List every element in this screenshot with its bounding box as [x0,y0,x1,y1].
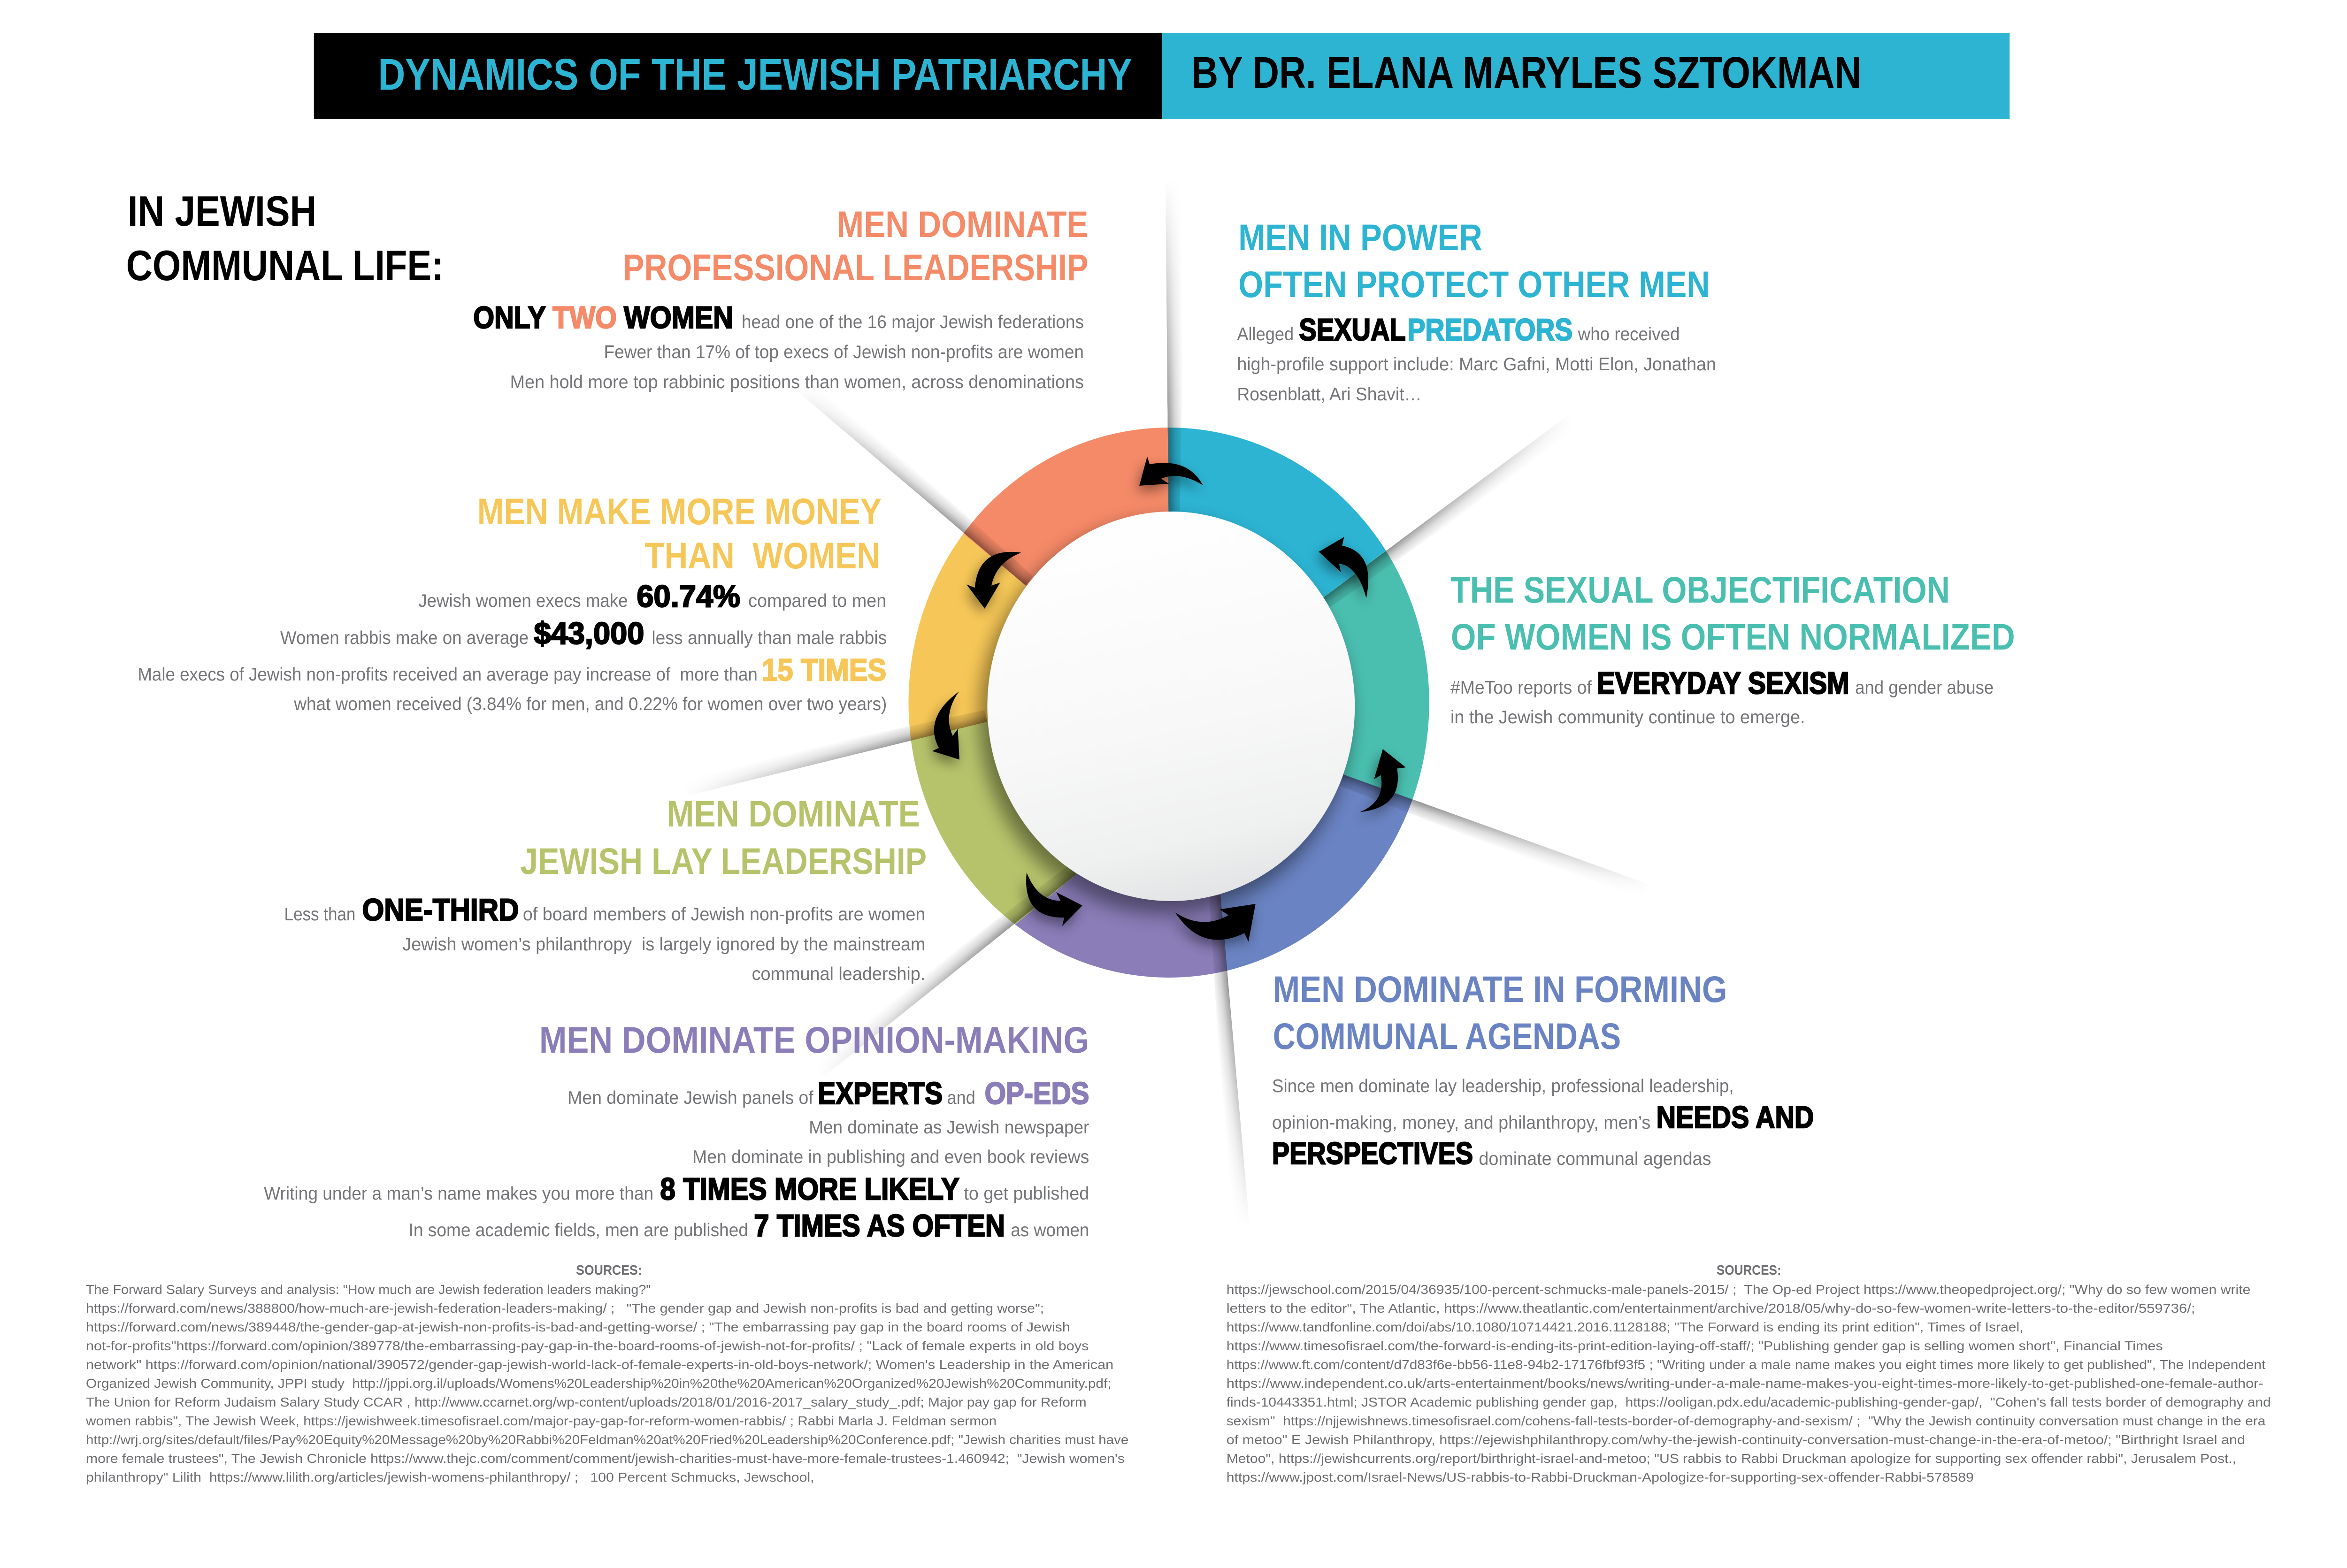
sources: right column: https://www.independent.co.uk/arts-entertainment/books/news/writing-under-a-male-name-makes-you-eight-times-more-likely-to-get-published-one-female-author- [1227,1376,2263,1391]
panel: the sexual objectification [1450,569,2015,727]
body text: Less than [284,904,355,925]
body text: Fewer than 17% of top execs of Jewish non-profits are women [604,342,1084,362]
body text: compared to men [748,591,886,611]
body text: Jewish women execs make [418,591,628,611]
body text: high-profile support include: Marc Gafni, Motti Elon, Jonathan [1237,354,1716,375]
heading: THE SEXUAL OBJECTIFICATION [1450,569,1950,611]
intro heading: IN JEWISH [128,187,316,235]
body text: 7 TIMES AS OFTEN [754,1208,1005,1243]
fold shadows: radiating rays [680,178,1653,1227]
sources: left column: Organized Jewish Community, JPPI study http://jppi.org.il/uploads/Womens%20Leadership%20in%20the%20American%20Organized%20Jewish%20Community.pdf; [86,1376,1111,1391]
heading: MEN DOMINATE IN FORMING [1273,969,1727,1010]
sources: left column [85,1262,1128,1484]
heading: THAN WOMEN [644,535,880,576]
body text: and gender abuse [1855,678,1994,698]
sources: right column: https://www.tandfonline.com/doi/abs/10.1080/10714421.2016.1128188; "The Forward is ending its print edition", Times of Israel, [1227,1319,2024,1334]
sources: right column: https://www.timesofisrael.com/the-forward-is-ending-its-print-edition-laying-off-staff/; "Publishing gender gap is selling women short", Financial Times [1227,1338,2163,1353]
sources: right column: SOURCES: [1717,1262,1781,1277]
arrow shadows [930,462,1404,947]
sources: right column: letters to the editor", The Atlantic, https://www.theatlantic.com/entertainment/archive/2018/05/why-do-so-few-women-write-letters-to-the-editor/559736/; [1227,1300,2195,1316]
heading: MEN DOMINATE [837,204,1088,245]
ring segments [909,428,1429,978]
body text: who received [1578,324,1680,344]
body text: to get published [964,1184,1089,1204]
heading [520,793,927,882]
heading: OF WOMEN IS OFTEN NORMALIZED [1451,616,2015,658]
body text [264,1076,1089,1243]
body text: dominate communal agendas [1479,1149,1711,1169]
heading [1238,217,1710,305]
body text: Women rabbis make on average [280,628,529,648]
body text: in the Jewish community continue to emerge. [1450,707,1805,727]
body text: as women [1011,1220,1089,1240]
body text: head one of the 16 major Jewish federations [742,312,1084,332]
body text: and [947,1088,975,1108]
sources: right column: https://www.ft.com/content/d7d83f6e-bb56-11e8-94b2-17176fbf93f5 ; "Writing under a male name makes you eight times more likely to get published", The Independent [1227,1357,2266,1372]
body text: EVERYDAY SEXISM [1597,665,1849,700]
body text: Alleged [1237,324,1294,344]
body text: Writing under a man’s name makes you more than [264,1184,653,1204]
body text [1450,665,1994,727]
sources: right column: of metoo" E Jewish Philanthropy, https://ejewishphilanthropy.com/why-the-jewish-continuity-conversation-must-change-in-the-era-of-metoo/; "Birthright Israel and [1227,1432,2245,1447]
body text: less annually than male rabbis [652,628,887,648]
arrow: purple to indigo [1175,904,1256,941]
cycle diagram [680,178,1653,1227]
arrow: teal to blue [1319,537,1368,598]
sources: left column: https://forward.com/news/388800/how-much-are-jewish-federation-leaders-making/ ; "The gender gap and Jewish non-profits is bad and getting worse"; [86,1300,1044,1316]
body text: communal leadership. [752,964,925,984]
sources: left column: women rabbis", The Jewish Week, https://jewishweek.timesofisrael.com/major-pay-gap-for-reform-women-rabbis/ ; Rabbi Marla J. Feldman sermon [85,1413,997,1428]
sources: left column: SOURCES: [576,1262,642,1277]
panel: men make more money [138,491,887,714]
body text: TWO [552,300,617,335]
body text: Men hold more top rabbinic positions than women, across denominations [510,372,1084,392]
body text: #MeToo reports of [1450,678,1592,698]
sources: left column: The Union for Reform Judaism Salary Study CCAR , http://www.ccarnet.org/wp-content/uploads/2018/01/2016-2017_salary_study_.pdf; Major pay gap for Reform [86,1394,1087,1409]
body text: Men dominate in publishing and even book reviews [692,1147,1089,1167]
body text [1237,312,1716,405]
body text: OP-EDS [985,1076,1089,1110]
body text: NEEDS AND [1657,1100,1814,1134]
body text [473,300,1084,392]
body text: Men dominate as Jewish newspaper [809,1117,1089,1138]
sources: left column: more female trustees", The Jewish Chronicle https://www.thejc.com/comment/comment/jewish-charities-must-have-more-female-trustees-1.460942; "Jewish women's [86,1451,1125,1466]
arrow: green to purple [1026,872,1082,926]
body text [284,892,925,984]
body text: 8 TIMES MORE LIKELY [660,1171,959,1206]
body text: ONE-THIRD [362,892,519,927]
body text: Since men dominate lay leadership, professional leadership, [1272,1076,1734,1096]
body text: EXPERTS [818,1076,943,1110]
heading [1273,969,1727,1057]
arrow: blue to coral [1139,457,1203,486]
disc shadow on ring [979,520,1351,914]
body text: Jewish women’s philanthropy is largely ignored by the mainstream [402,934,925,955]
title: DYNAMICS OF THE JEWISH PATRIARCHY [378,49,1132,99]
panel: jewish lay leadership [284,793,927,984]
arrow: indigo to teal [1360,749,1406,812]
heading: PROFESSIONAL LEADERSHIP [623,247,1088,288]
title banner [314,33,2010,119]
panel: opinion-making [264,1019,1089,1243]
body text: In some academic fields, men are published [409,1220,748,1240]
sources: left column: network" https://forward.com/opinion/national/390572/gender-gap-jewish-world-lack-of-female-experts-in-old-boys-network/; Women's Leadership in the American [86,1357,1113,1372]
body text: ONLY [473,300,546,335]
center disc [987,512,1355,901]
arrows [930,457,1406,947]
sources: left column: http://wrj.org/sites/default/files/Pay%20Equity%20Message%20by%20Rabbi%20Feldman%20at%20Fried%20Leadership%20Conference.pdf; "Jewish charities must have [86,1432,1128,1447]
sources: left column: not-for-profits"https://forward.com/opinion/389778/the-embarrassing-pay-gap-in-the-board-rooms-of-jewish-not-for-profits/ ; "Lack of female experts in old boys [86,1338,1089,1353]
heading [623,204,1088,288]
heading: MEN DOMINATE OPINION-MAKING [539,1019,1089,1061]
intro heading [126,187,444,290]
body text: Men dominate Jewish panels of [568,1088,813,1108]
heading: COMMUNAL AGENDAS [1273,1016,1621,1057]
intro heading: COMMUNAL LIFE: [126,242,444,290]
sources: right column [1227,1262,2271,1484]
body text: what women received (3.84% for men, and 0.22% for women over two years) [293,694,887,714]
body text: PERSPECTIVES [1272,1136,1473,1170]
arrow: coral to yellow [966,552,1021,609]
body text: 60.74% [637,579,740,613]
body text: PREDATORS [1407,312,1572,347]
heading: OFTEN PROTECT OTHER MEN [1238,264,1710,305]
sources: right column: sexism" https://njjewishnews.timesofisrael.com/cohens-fall-tests-border-of-demography-and-sexism/ ; "Why the Jewish continuity conversation must change in the era [1227,1413,2266,1428]
body text [138,579,887,714]
body text: SEXUAL [1299,312,1406,347]
body text: $43,000 [534,616,644,650]
sources: right column: Metoo", https://jewishcurrents.org/report/birthright-israel-and-metoo; "US rabbis to Rabbi Druckman apologize for supporting sex offender rabbi", Jerusalem Post., [1227,1451,2236,1466]
panel: forming communal agendas [1272,969,1814,1170]
arrow: yellow to green [932,691,959,759]
heading: MEN DOMINATE [667,793,920,834]
body text [1272,1076,1814,1170]
sources: left column: The Forward Salary Surveys and analysis: "How much are Jewish federation leaders making?" [86,1282,651,1297]
author byline: BY DR. ELANA MARYLES SZTOKMAN [1191,47,1861,98]
body text: of board members of Jewish non-profits are women [523,904,925,925]
sources: right column: https://www.jpost.com/Israel-News/US-rabbis-to-Rabbi-Druckman-Apologize-for-supporting-sex-offender-Rabbi-578589 [1227,1469,1974,1484]
body text: Male execs of Jewish non-profits received an average pay increase of more than [138,665,758,685]
body text: opinion-making, money, and philanthropy, men’s [1272,1113,1650,1133]
sources: left column: https://forward.com/news/389448/the-gender-gap-at-jewish-non-profits-is-bad-and-getting-worse/ ; "The embarrassing pay gap in the board rooms of Jewish [86,1319,1070,1334]
sources: left column: philanthropy" Lilith https://www.lilith.org/articles/jewish-womens-philanthropy/ ; 100 Percent Schmucks, Jewschool, [86,1469,814,1484]
body text: Rosenblatt, Ari Shavit… [1237,384,1422,405]
heading [477,491,882,576]
heading: MEN IN POWER [1238,217,1482,258]
heading [1450,569,2015,658]
heading: MEN MAKE MORE MONEY [477,491,882,532]
heading: JEWISH LAY LEADERSHIP [520,841,927,882]
sources: right column: https://jewschool.com/2015/04/36935/100-percent-schmucks-male-panels-2015/ ; The Op-ed Project https://www.theopedproject.org/; "Why do so few women write [1227,1282,2250,1297]
sources: right column: finds-10443351.html; JSTOR Academic publishing gender gap, https://ooligan.pdx.edu/academic-publishing-gender-gap/, "Cohen's fall tests border of demography and [1227,1394,2271,1409]
body text: WOMEN [624,300,733,335]
body text: 15 TIMES [762,652,886,687]
panel: men in power [1237,217,1716,405]
panel: professional leadership [473,204,1088,392]
